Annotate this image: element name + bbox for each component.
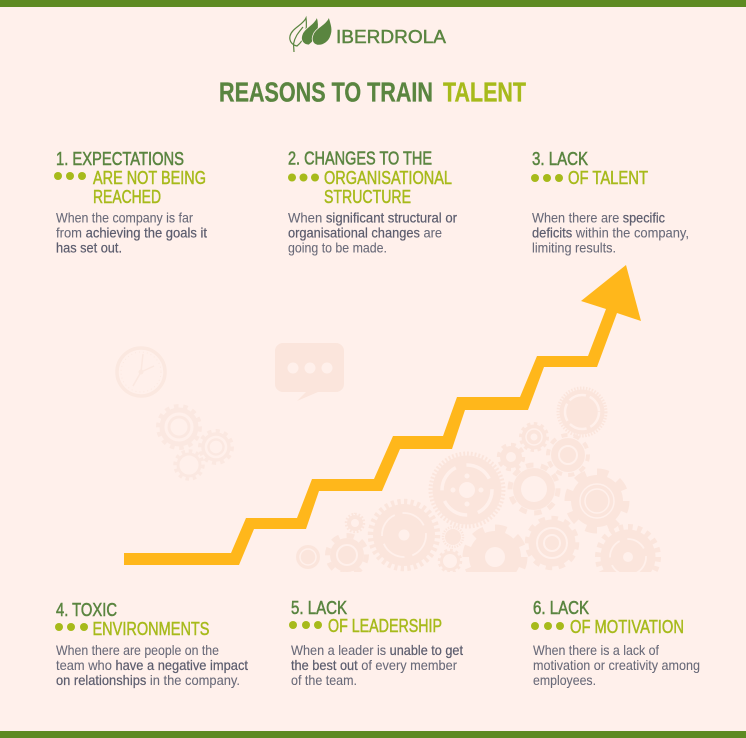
gear lower left <box>328 536 366 574</box>
description: When there are people on the <box>56 643 219 658</box>
subheading: OF MOTIVATION <box>570 616 684 637</box>
heading: 6. LACK <box>533 597 589 618</box>
gear rings lower <box>527 518 577 568</box>
description: organisational changes are <box>288 226 442 240</box>
panel: reason 1 <box>54 148 207 256</box>
icon: three leaves <box>290 17 332 52</box>
background illustration: gear cluster <box>296 388 658 587</box>
wordmark: IBERDROLA <box>336 26 447 47</box>
panel: reason 2 <box>288 148 457 256</box>
subheading: OF LEADERSHIP <box>328 615 442 636</box>
description: When there are specific <box>532 210 665 226</box>
description: When a leader is unable to get <box>291 643 463 658</box>
subheading: REACHED <box>93 186 161 207</box>
description: has set out. <box>56 240 122 256</box>
gear small left <box>498 444 524 470</box>
description: When there is a lack of <box>533 643 659 658</box>
description: When the company is far <box>56 210 193 226</box>
bullet dots <box>289 621 322 629</box>
bullet dots <box>288 174 319 182</box>
description: deficits within the company, <box>532 226 689 240</box>
description <box>56 210 207 256</box>
heading: 4. TOXIC <box>56 599 117 620</box>
subheading <box>93 167 206 207</box>
panel: reason 5 <box>289 597 463 688</box>
description: going to be made. <box>288 240 387 256</box>
description: employees. <box>533 673 596 688</box>
gear fine tiny <box>443 527 463 547</box>
gear large lower <box>370 502 438 568</box>
description: on relationships in the company. <box>56 673 240 688</box>
subheading: ARE NOT BEING <box>93 167 206 188</box>
subheading <box>324 167 452 207</box>
gear lower small <box>439 550 461 572</box>
background icon: speech bubble <box>275 343 344 401</box>
gear right middle <box>548 435 588 475</box>
gear small upper <box>520 424 548 450</box>
gear top right <box>558 388 606 436</box>
gear chunky right <box>568 472 626 530</box>
subheading: ENVIRONMENTS <box>92 618 210 639</box>
heading: 1. EXPECTATIONS <box>56 148 184 169</box>
panel: reason 3 <box>531 148 689 256</box>
gear chunky lower <box>466 528 524 586</box>
gear tiny <box>346 514 364 532</box>
bullet dots <box>531 174 563 182</box>
bullet dots <box>55 623 88 631</box>
title: TALENT <box>443 76 526 108</box>
gear far right <box>595 524 661 572</box>
description: team who have a negative impact <box>56 658 248 673</box>
title: REASONS TO TRAIN <box>219 76 433 108</box>
gear round <box>296 545 320 569</box>
description <box>532 210 689 256</box>
heading: 2. CHANGES TO THE <box>288 148 432 168</box>
heading: 5. LACK <box>291 597 347 618</box>
subheading: ORGANISATIONAL <box>324 167 452 188</box>
bullet dots <box>531 622 564 630</box>
description: from achieving the goals it <box>56 226 207 240</box>
background icon: clock <box>117 348 165 396</box>
background icon: small gears <box>158 406 232 479</box>
arrow: rising staircase <box>124 265 641 565</box>
heading: 3. LACK <box>532 148 588 169</box>
description: of the team. <box>291 673 357 688</box>
gear centre <box>510 465 558 513</box>
description <box>291 643 463 688</box>
bullet dots <box>54 172 86 180</box>
bottom green bar <box>0 731 746 738</box>
subheading: OF TALENT <box>568 167 648 188</box>
description: When significant structural or <box>288 210 457 226</box>
subheading: STRUCTURE <box>324 186 411 207</box>
description <box>288 210 457 256</box>
top green bar <box>0 0 746 7</box>
gear large fine <box>430 454 504 526</box>
panel: reason 6 <box>531 597 700 688</box>
description <box>56 643 248 688</box>
logo: Iberdrola <box>290 17 447 52</box>
description <box>533 643 700 688</box>
description: motivation or creativity among <box>533 658 700 673</box>
panel: reason 4 <box>55 599 248 688</box>
description: limiting results. <box>532 240 616 256</box>
description: the best out of every member <box>291 658 457 673</box>
